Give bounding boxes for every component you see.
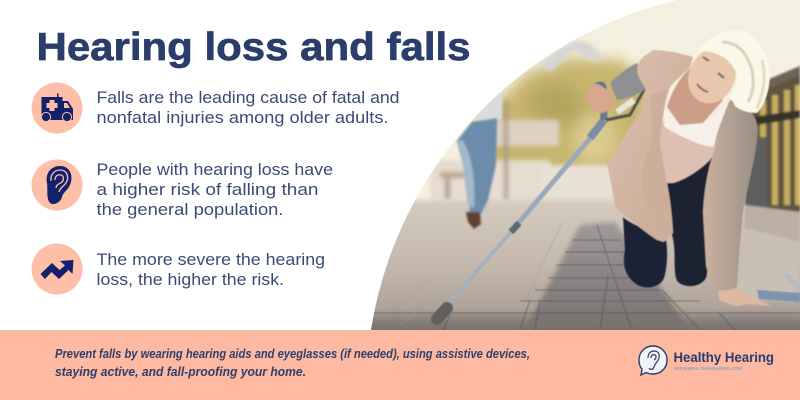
text: prevention advice: Prevent falls by wearing hearing aids and eyeglasses (if needed), using assistive devices, [55, 346, 530, 361]
hand on crutch [587, 84, 613, 113]
right sleeve [703, 100, 758, 291]
footer band [0, 330, 800, 400]
text: hearing loss statement: a higher risk of falling than [96, 181, 318, 199]
blurred passer-by [457, 92, 502, 229]
title: Hearing loss and falls [36, 26, 470, 69]
pink inner top [660, 120, 716, 183]
crutch on ground [757, 274, 800, 302]
text: severity statement: loss, the higher the risk. [96, 271, 284, 289]
text: hearing loss statement: the general population. [96, 201, 284, 219]
hair [695, 31, 770, 113]
item: falls are the leading cause [32, 82, 400, 134]
text: prevention advice [55, 346, 530, 379]
icon: ambulance [32, 82, 82, 134]
photo: older woman fallen on pavement beside her crutch [360, 0, 800, 340]
cardigan [607, 50, 693, 242]
text: hearing loss statement [96, 161, 333, 219]
item: severity raises risk [32, 244, 325, 294]
text: falls statement [96, 89, 400, 127]
shaded paving [530, 220, 684, 324]
paving joints [372, 225, 800, 330]
photo background: sky, trees and walkway [360, 0, 800, 340]
item: hearing loss raises fall risk [32, 160, 333, 219]
logo: Healthy Hearing [639, 346, 774, 375]
icon: rising arrow [32, 244, 82, 294]
text: severity statement: The more severe the hearing [96, 251, 325, 269]
hand on ground [718, 289, 771, 306]
white inner top [664, 103, 728, 147]
logo: Healthy Hearing: WWW.HEALTHYHEARING.COM [674, 366, 742, 371]
trousers [623, 217, 667, 287]
left sleeve [610, 63, 648, 100]
icon: ear [32, 160, 82, 210]
crutch [437, 88, 645, 319]
text: prevention advice: staying active, and fall-proofing your home. [55, 364, 306, 379]
woman [587, 31, 771, 306]
text: hearing loss statement: People with hearing loss have [96, 161, 333, 179]
text: falls statement: Falls are the leading cause of fatal and [96, 89, 400, 107]
logo: Healthy Hearing: Healthy Hearing [674, 349, 774, 365]
text: falls statement: nonfatal injuries among older adults. [96, 109, 388, 127]
text: severity statement [96, 251, 325, 289]
neck and chest [667, 68, 723, 125]
fence [745, 66, 800, 242]
face [688, 51, 736, 104]
